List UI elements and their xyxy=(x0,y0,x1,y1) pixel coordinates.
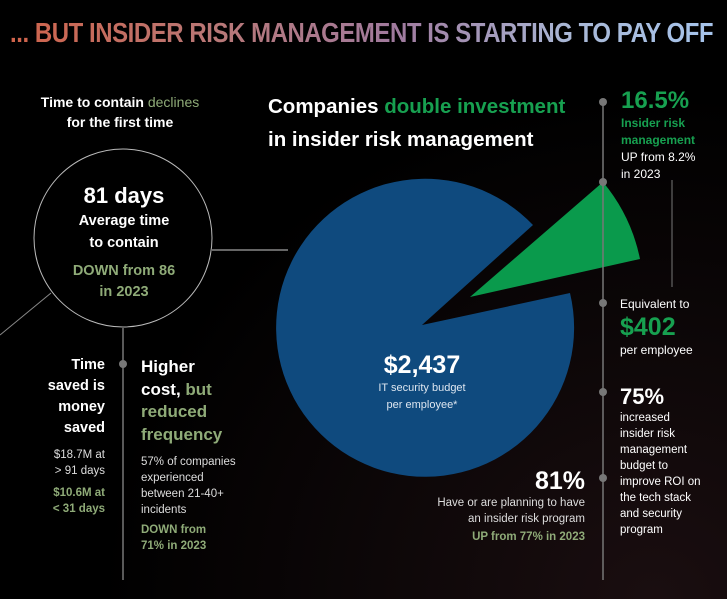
pie label: $2,437: $2,437 xyxy=(384,351,460,379)
stat: 16.5%: 16.5% xyxy=(621,87,689,114)
stat: 75%: 75% xyxy=(620,384,664,409)
text: time saved is money saved: money xyxy=(58,399,105,415)
stat: 75%: and security xyxy=(620,508,682,520)
text: higher cost, reduced frequency: 71% in 2023 xyxy=(141,540,206,552)
stat: 16.5%: Insider risk xyxy=(621,116,685,130)
stat: 75%: increased xyxy=(620,412,670,424)
text: higher cost, reduced frequency: 57% of companies xyxy=(141,456,236,468)
text: time saved is money saved: < 31 days xyxy=(53,503,105,515)
stat: $402: Equivalent to xyxy=(620,297,689,311)
stat: 75% xyxy=(620,384,701,536)
circle outline xyxy=(34,149,212,327)
stat: 75%: the tech stack xyxy=(620,492,691,504)
stat: $402: per employee xyxy=(620,343,693,357)
heading: companies double investment: in insider risk management xyxy=(268,128,533,151)
text: higher cost, reduced frequency: cost, but xyxy=(141,380,212,398)
text: higher cost, reduced frequency: frequency xyxy=(141,424,222,444)
stat: 16.5%: in 2023 xyxy=(621,167,660,181)
heading: time to contain xyxy=(40,94,199,130)
text: time saved is money saved: saved is xyxy=(48,378,105,394)
stat: 81%: UP from 77% in 2023 xyxy=(472,531,585,543)
pie label: $2,437: IT security budget xyxy=(378,382,466,394)
stat: 75%: insider risk xyxy=(620,428,675,440)
text: higher cost, reduced frequency: reduced xyxy=(141,402,207,421)
text: higher cost, reduced frequency: incidents xyxy=(141,504,186,516)
circle stat: 81 days xyxy=(73,183,175,300)
stat: 81%: an insider risk program xyxy=(468,513,585,525)
text: higher cost, reduced frequency: between 21-40+ xyxy=(141,488,224,500)
stat: 75%: budget to xyxy=(620,460,668,472)
circle stat: 81 days: DOWN from 86 xyxy=(73,263,175,279)
text: time saved is money saved: $18.7M at xyxy=(54,449,105,461)
pie: green insider risk wedge xyxy=(470,182,640,297)
stat: 81%: Have or are planning to have xyxy=(437,497,585,509)
stat: $402: $402 xyxy=(620,313,676,341)
pie label: $2,437 xyxy=(378,351,466,411)
circle stat: 81 days: to contain xyxy=(89,235,159,251)
stat: 16.5% xyxy=(621,87,695,181)
stat: 81% xyxy=(437,467,585,543)
heading: time to contain: for the first time xyxy=(67,114,173,130)
stat: 16.5%: UP from 8.2% xyxy=(621,150,695,164)
heading: companies double investment: Companies double investment xyxy=(268,95,565,118)
stat: 81%: 81% xyxy=(535,467,585,495)
heading: companies double investment xyxy=(268,95,566,151)
text: time saved is money saved: > 91 days xyxy=(55,465,105,477)
text: higher cost, reduced frequency: Higher xyxy=(141,357,195,376)
text: time saved is money saved xyxy=(48,357,105,515)
text: time saved is money saved: Time xyxy=(71,357,105,373)
circle stat: 81 days: Average time xyxy=(79,213,169,229)
title: ... BUT INSIDER RISK MANAGEMENT IS STARTING TO PAY OFF xyxy=(10,17,713,48)
text: time saved is money saved: $10.6M at xyxy=(53,487,105,499)
text: time saved is money saved: saved xyxy=(64,420,105,436)
text: higher cost, reduced frequency: DOWN from xyxy=(141,524,206,536)
stat: $402 xyxy=(620,297,693,357)
stat: 75%: improve ROI on xyxy=(620,476,701,488)
circle stat: 81 days: in 2023 xyxy=(99,284,149,300)
heading: time to contain: Time to contain declines xyxy=(41,94,199,110)
text: higher cost, reduced frequency xyxy=(141,357,236,552)
pie label: $2,437: per employee* xyxy=(387,399,457,411)
text: higher cost, reduced frequency: experienced xyxy=(141,472,204,484)
stat: 75%: program xyxy=(620,524,663,536)
pie: blue budget xyxy=(276,179,574,477)
stat: 75%: management xyxy=(620,444,687,456)
circle stat: 81 days: 81 days xyxy=(84,183,164,208)
stat: 16.5%: management xyxy=(621,133,695,147)
